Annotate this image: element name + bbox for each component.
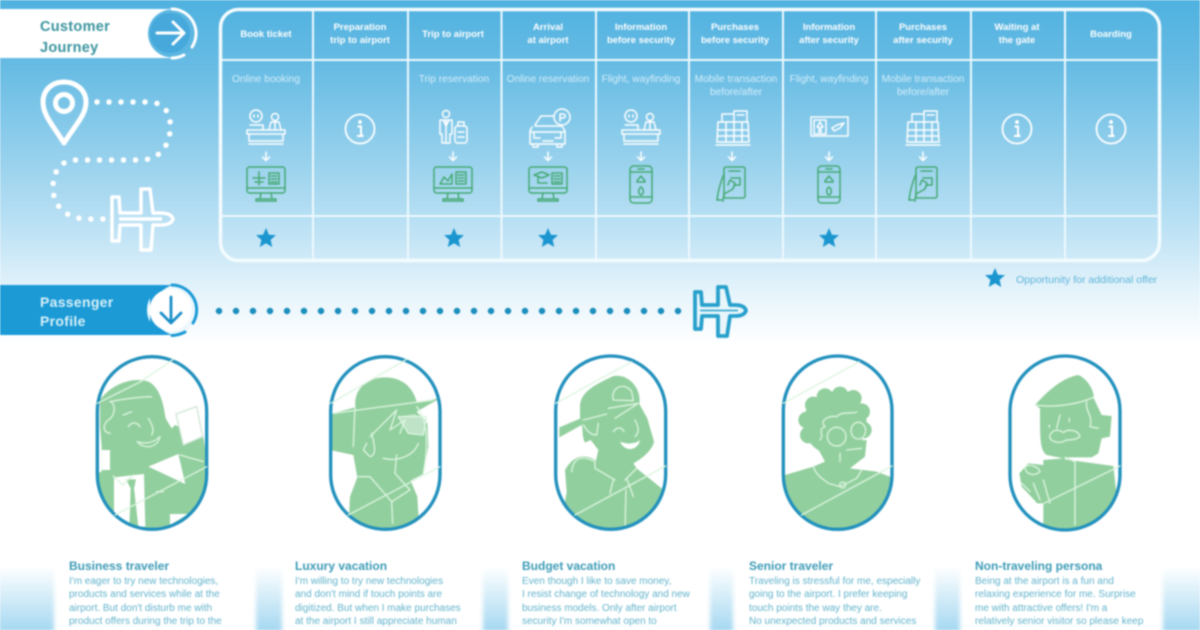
profile: business traveler: I'm eager to try new technologies,: [69, 576, 218, 587]
column headers: [240, 22, 1132, 46]
banner heading: Customer: [40, 19, 110, 35]
persona window: business traveler: [97, 357, 208, 530]
arrow down icon: [161, 297, 181, 323]
profile: non-traveling persona: [975, 559, 1144, 627]
touch point descriptions: Trip reservation: [419, 74, 489, 85]
persona window: budget vacation: [556, 356, 668, 532]
touch point descriptions: before/after: [710, 87, 763, 98]
profile: luxury vacation: [295, 559, 461, 627]
icon: hand holding phone: [909, 167, 937, 201]
profile: luxury vacation: Luxury vacation: [295, 559, 387, 573]
journey table: [220, 10, 1160, 260]
profile: non-traveling persona: me with attractive offers! I'm a: [975, 603, 1108, 614]
column headers: Book ticket: [240, 29, 292, 40]
profile: luxury vacation: at the airport I still appreciate human: [295, 616, 457, 627]
profile: senior traveler: touch points the way they are.: [749, 603, 882, 614]
column headers: before security: [701, 35, 770, 46]
column headers: trip to airport: [330, 35, 391, 46]
profile: luxury vacation: I'm willing to try new technologies: [295, 576, 443, 587]
touch point descriptions: Mobile transaction: [695, 74, 777, 85]
opportunity stars: [256, 228, 839, 247]
legend: [985, 268, 1158, 287]
arrow icon: [157, 22, 184, 44]
profile: business traveler: airport. But don't disturb me with: [69, 603, 212, 614]
touch point descriptions: [232, 74, 964, 98]
profile: business traveler: [69, 559, 222, 627]
column headers: Purchases: [711, 22, 759, 33]
profile: business traveler: Business traveler: [69, 559, 169, 573]
persona window: luxury vacation: [330, 357, 440, 530]
column headers: Information: [803, 22, 855, 33]
profile: business traveler: product offers during the trip to the: [69, 616, 222, 627]
profile: business traveler: products and services while at the: [69, 589, 220, 600]
profile: senior traveler: going to the airport. I prefer keeping: [749, 589, 907, 600]
touch point descriptions: Flight, wayfinding: [790, 74, 869, 85]
top sky gradient background: [0, 0, 1200, 345]
profile: budget vacation: business models. Only after airport: [522, 603, 677, 614]
touch point descriptions: Mobile transaction: [882, 74, 964, 85]
icon: traveler with luggage: [440, 110, 467, 143]
profile: budget vacation: security I'm somewhat open to: [522, 616, 657, 627]
icon: wayfinding sign: [811, 117, 848, 136]
icon: blue plane: [695, 287, 746, 336]
icon: car with parking sign: [530, 109, 570, 147]
banner heading: Passenger: [40, 294, 114, 310]
icon: location pin: [43, 82, 86, 143]
icon: hand holding phone: [717, 167, 745, 201]
profile: luxury vacation: digitized. But when I make purchases: [295, 603, 461, 614]
profile: non-traveling persona: Being at the airport is a fun and: [975, 576, 1114, 587]
dotted line to plane: [219, 308, 682, 314]
persona window: non-traveling persona: [1010, 356, 1121, 532]
ring around arrow: [172, 9, 196, 58]
column headers: at airport: [527, 35, 569, 46]
profile: senior traveler: [749, 559, 920, 627]
column headers: the gate: [999, 35, 1035, 46]
column headers: before security: [607, 35, 676, 46]
info icons: [346, 114, 1126, 144]
icon: smartphone wayfinding: [630, 166, 652, 203]
column headers: after security: [893, 35, 954, 46]
dotted route: [53, 102, 170, 219]
persona window: senior traveler: [782, 356, 892, 532]
icon: cash register: [716, 111, 750, 145]
profile: non-traveling persona: relaxing experience for me. Surprise: [975, 589, 1136, 600]
column headers: Preparation: [334, 22, 387, 33]
profile: luxury vacation: and don't mind if touch points are: [295, 589, 442, 600]
touch point descriptions: Online booking: [232, 74, 300, 85]
icon: information desk: [622, 110, 660, 144]
profile: budget vacation: Even though I like to save money,: [522, 576, 671, 587]
column headers: Trip to airport: [422, 29, 485, 40]
customer journey banner: [0, 9, 196, 58]
column headers: Boarding: [1090, 29, 1132, 40]
legend: Opportunity for additional offer: [1016, 274, 1158, 286]
touch point descriptions: Online reservation: [507, 74, 589, 85]
icon: monitor reservation: [529, 167, 567, 201]
icon: cash register: [906, 111, 940, 145]
column headers: after security: [799, 35, 860, 46]
profile: budget vacation: [522, 559, 691, 627]
column headers: Waiting at: [994, 22, 1040, 33]
icon: monitor booking: [247, 167, 285, 201]
customer journey banner: Journey: [40, 40, 99, 56]
passenger profile banner: Profile: [40, 313, 86, 329]
profile: budget vacation: Budget vacation: [522, 559, 615, 573]
column headers: Information: [615, 22, 667, 33]
column headers: Arrival: [533, 22, 563, 33]
passenger profile banner: [0, 285, 197, 336]
column headers: Purchases: [899, 22, 947, 33]
profile: senior traveler: No unexpected products and services: [749, 616, 916, 627]
icon: ticket desk: [247, 110, 285, 144]
touch point descriptions: Flight, wayfinding: [602, 74, 681, 85]
profile: non-traveling persona: Non-traveling persona: [975, 559, 1103, 573]
icon: white plane: [112, 189, 173, 250]
touch point descriptions: before/after: [897, 87, 950, 98]
bottom gradient band: [0, 566, 1200, 630]
profile: senior traveler: Senior traveler: [749, 559, 833, 573]
white text cards: [54, 566, 1163, 630]
profile: non-traveling persona: relatively senior visitor so please keep: [975, 616, 1144, 627]
arrows from touch point to channel: [262, 152, 926, 160]
icon: smartphone wayfinding: [818, 166, 840, 203]
profile: senior traveler: Traveling is stressful for me, especially: [749, 576, 920, 587]
icon: monitor trip: [434, 167, 472, 201]
profile: budget vacation: I resist change of technology and new: [522, 589, 691, 600]
